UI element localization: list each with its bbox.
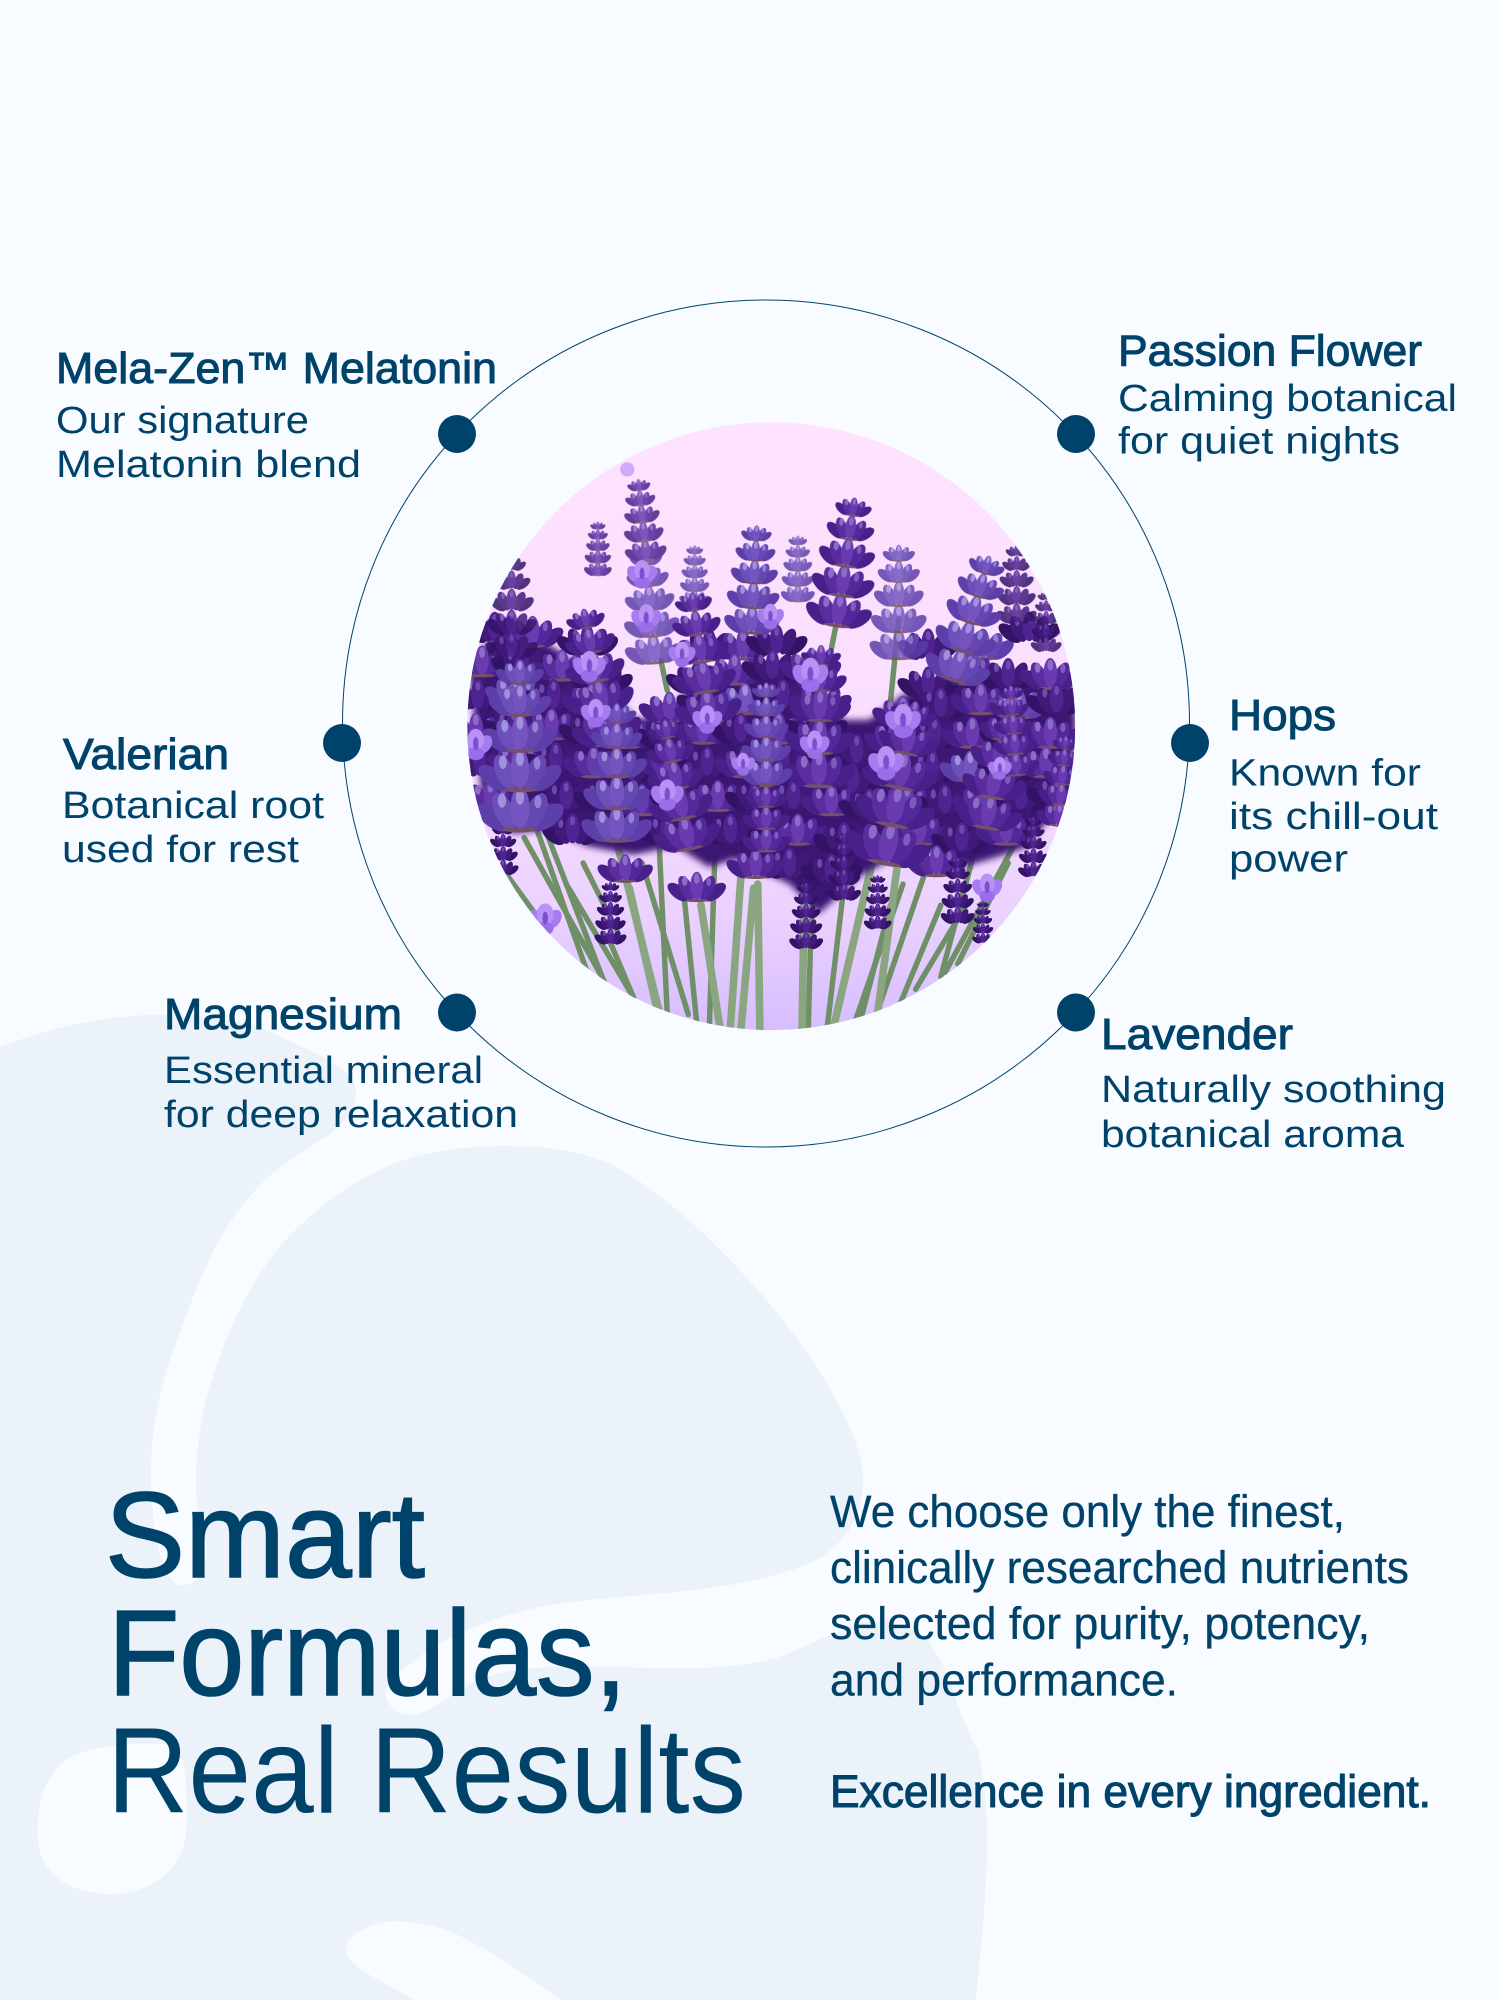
ingredient: Valerian: Botanical root (62, 785, 324, 827)
open blossoms (572, 650, 606, 682)
ingredient: Passion Flower: for quiet nights (1118, 420, 1400, 462)
ingredient: Passion Flower: Calming botanical (1118, 378, 1457, 420)
title: Real Results (107, 1702, 746, 1838)
front flower spikes (806, 497, 876, 629)
stems (507, 619, 1063, 1031)
ingredient: Valerian: used for rest (62, 829, 299, 871)
description text: We choose only the finest, (830, 1486, 1345, 1537)
description text (830, 1486, 1431, 1817)
ingredient: Mela-Zen Melatonin: Melatonin blend (56, 444, 361, 486)
ingredient: Passion Flower (1057, 326, 1457, 462)
ingredient: Hops: Hops (1229, 691, 1336, 740)
ingredient: Lavender: Lavender (1101, 1010, 1293, 1059)
ingredient: Hops: its chill-out (1229, 796, 1439, 838)
ingredient ring (342, 300, 1190, 1147)
ingredient: Mela-Zen Melatonin: Our signature (56, 400, 309, 442)
decorative background blob (0, 1015, 987, 2000)
ingredient: Lavender (1057, 994, 1446, 1156)
ingredient: Valerian: Valerian (63, 730, 229, 779)
ingredient: Hops: Known for (1229, 752, 1421, 794)
description text: and performance. (830, 1654, 1178, 1706)
ingredient: Hops: power (1229, 838, 1348, 880)
ingredient: Mela-Zen Melatonin: Mela-Zen™ Melatonin (56, 344, 497, 393)
ingredient: Hops (1171, 691, 1439, 880)
lavender photo circle (467, 422, 1076, 1030)
description text: selected for purity, potency, (830, 1598, 1370, 1649)
ingredient: Mela-Zen Melatonin (56, 344, 497, 486)
title (105, 1467, 746, 1838)
description text: clinically researched nutrients (830, 1542, 1409, 1593)
lower flower spikes (594, 882, 626, 945)
ingredient: Lavender: botanical aroma (1101, 1114, 1405, 1156)
ingredient: Magnesium: for deep relaxation (164, 1094, 518, 1136)
ingredient: Lavender: Naturally soothing (1101, 1069, 1446, 1111)
ingredient: Passion Flower: Passion Flower (1118, 326, 1422, 376)
description text: Excellence in every ingredient. (830, 1766, 1431, 1817)
dark flower mass (469, 619, 1076, 913)
title: Smart (105, 1467, 425, 1603)
ingredient: Valerian (62, 724, 361, 871)
ingredient: Magnesium: Magnesium (164, 990, 402, 1039)
ingredient: Magnesium: Essential mineral (164, 1050, 483, 1092)
ingredient: Magnesium (164, 990, 518, 1136)
filler florets: bushy flower mass (442, 612, 1091, 889)
back flower spikes (483, 477, 1063, 670)
title: Formulas, (108, 1585, 627, 1721)
